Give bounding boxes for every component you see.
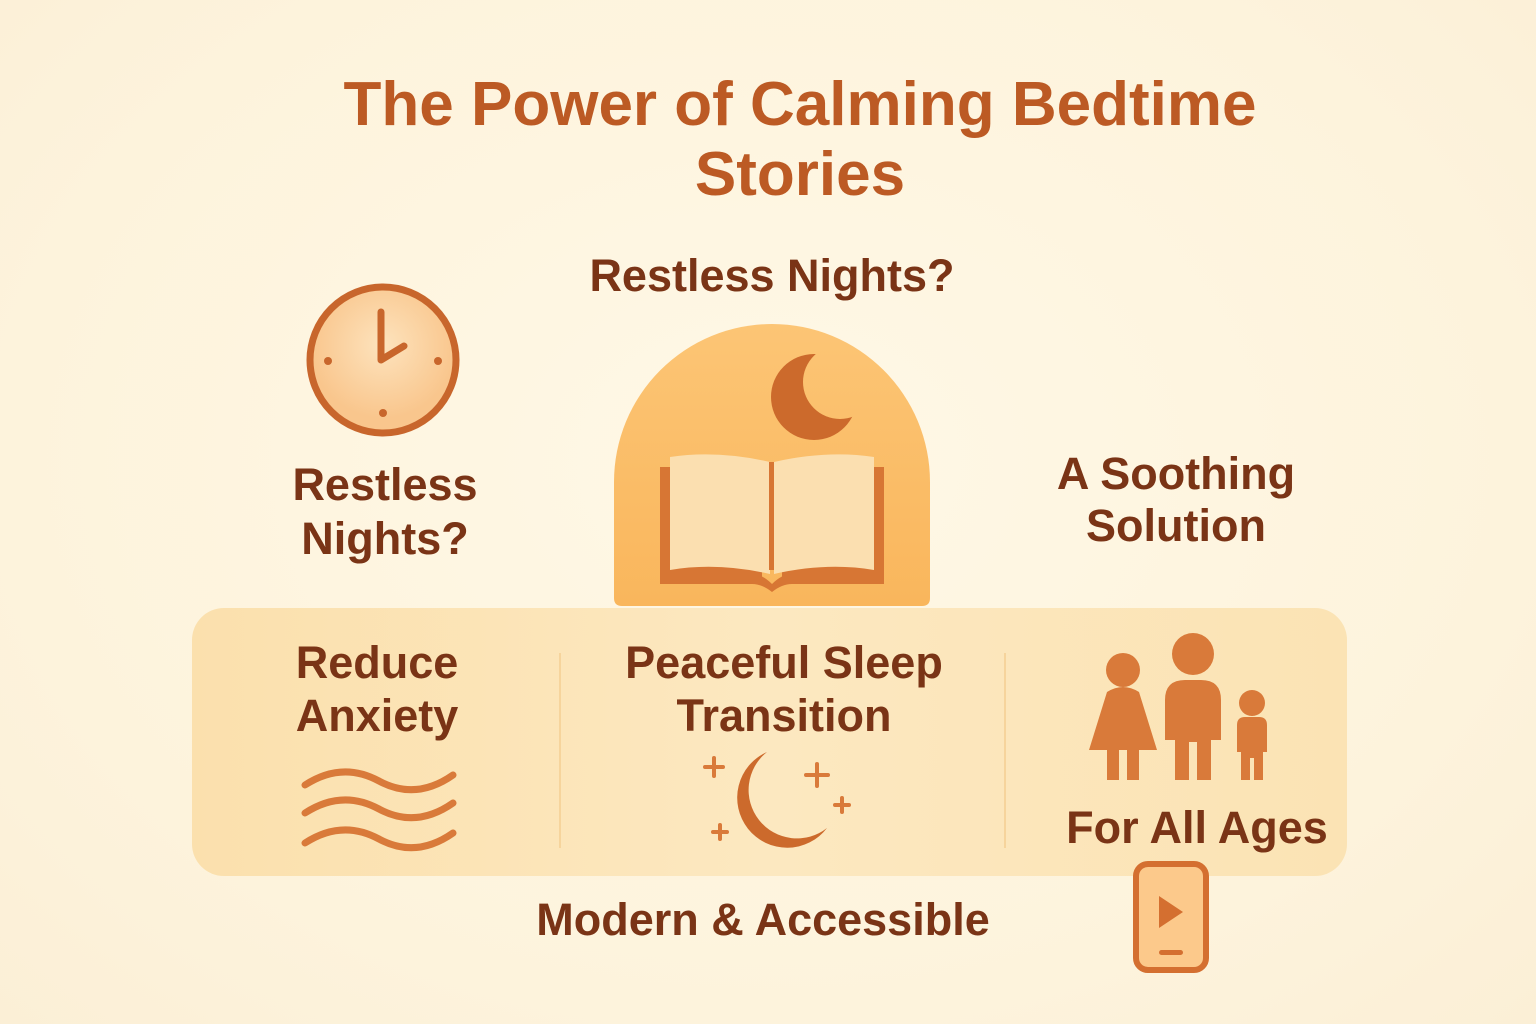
icon: moon with sparkles [703, 752, 851, 848]
text: for all ages: For All Ages [1066, 802, 1328, 853]
text: restless nights left: Nights? [301, 513, 469, 564]
text: a soothing solution: Solution [1086, 500, 1266, 551]
title [344, 70, 1256, 209]
icon: family [1089, 633, 1267, 780]
text: peaceful sleep transition: Peaceful Sleep [625, 637, 943, 688]
text: peaceful sleep transition: Transition [676, 690, 892, 741]
text: reduce anxiety [296, 637, 458, 741]
text: peaceful sleep transition [625, 637, 943, 741]
text: restless nights left [292, 459, 478, 564]
text: modern & accessible: Modern & Accessible [536, 894, 990, 945]
heading: restless nights top: Restless Nights? [589, 250, 955, 301]
text: a soothing solution [1057, 448, 1295, 551]
panel: benefits [192, 608, 1347, 876]
icon: phone [1133, 861, 1209, 973]
title: The Power of Calming Bedtime [344, 70, 1256, 139]
text: reduce anxiety: Anxiety [296, 690, 458, 741]
icon: clock [306, 284, 460, 436]
icon: waves [302, 768, 456, 852]
text: a soothing solution: A Soothing [1057, 448, 1295, 499]
title: Stories [695, 140, 905, 209]
icon: arch with moon and book [614, 324, 930, 606]
text: restless nights left: Restless [292, 459, 478, 510]
text: reduce anxiety: Reduce [296, 637, 458, 688]
